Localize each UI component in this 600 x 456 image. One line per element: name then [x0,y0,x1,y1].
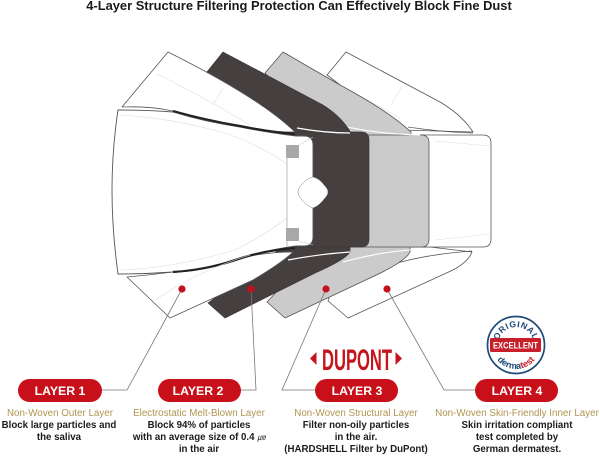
layer 2 mask: dark melt-blown layer [207,52,369,318]
leader line: layer 2 [241,289,256,390]
dupont logo [310,344,402,377]
layer 4 caption: Non-Woven Skin-Friendly Inner Layer [435,408,600,419]
layer 3 caption: Non-Woven Structural Layer [294,408,418,419]
layer 4 caption: LAYER 4 [492,384,543,398]
dermatest badge [486,316,546,374]
layer 2 caption: with an average size of 0.4 ㎛ [132,432,266,443]
layer 4 mask: white inner layer [300,52,491,318]
layer 3 caption: (HARDSHELL Filter by DuPont) [284,444,428,455]
layer 3 caption: in the air. [335,432,378,443]
dupont logo: DUPONT [322,344,392,377]
layer 2 caption: Electrostatic Melt-Blown Layer [133,408,266,419]
valve opening [298,177,328,208]
layer 2 caption [132,379,266,455]
layer 2 caption: Block 94% of particles [148,420,250,431]
layer 2 caption: in the air [179,444,219,455]
leader line: layer 4 [387,289,475,390]
layer 3 caption: Filter non-oily particles [303,420,409,431]
dermatest badge: EXCELLENT [493,340,538,350]
layer 1 caption: the saliva [37,432,82,443]
dermatest badge: dermatest [498,356,535,370]
layer 3 mask: grey structural layer [265,52,429,318]
layer 1 caption: Non-Woven Outer Layer [7,408,114,419]
layer 4 caption: German dermatest. [473,444,561,455]
layer 3 caption [284,379,428,455]
layer 2 caption: LAYER 2 [173,384,224,398]
leader line: layer 1 [102,289,182,390]
marker dots [178,285,391,293]
layer 1 caption: Block large particles and [2,420,116,431]
leader line: layer 3 [282,289,326,390]
layer 4 caption [435,379,600,455]
layer 4 caption: Skin irritation compliant [462,420,573,431]
layer 1 mask: white outer layer [112,52,313,318]
diagram: exploded mask layers [112,52,491,318]
layer 4 caption: test completed by [476,432,559,443]
dermatest badge: ORIGINAL [494,321,538,338]
layer 1 caption [2,379,116,443]
layer 1 caption: LAYER 1 [35,384,86,398]
nose clip squares [286,145,299,241]
layer 3 caption: LAYER 3 [332,384,383,398]
